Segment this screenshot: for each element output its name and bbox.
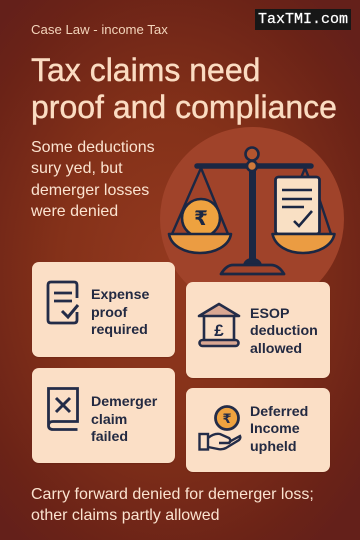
card: deferred income upheld	[186, 388, 330, 472]
card: demerger claim failed	[32, 368, 175, 463]
icon: hand holding rupee coin: ₹	[222, 412, 232, 427]
label: Income	[250, 421, 300, 437]
base	[221, 258, 284, 274]
card: expense proof required	[32, 262, 175, 357]
title: Tax claims need	[31, 52, 260, 88]
label: Demerger	[91, 394, 157, 410]
title	[31, 52, 337, 125]
subtitle: Some deductions	[31, 138, 155, 156]
subtitle: were denied	[31, 203, 118, 220]
label: proof	[91, 305, 127, 321]
label: deduction	[250, 323, 318, 339]
right pan	[272, 234, 334, 253]
illustration: balance scale	[160, 127, 344, 284]
label: claim	[91, 412, 127, 428]
label	[250, 404, 308, 455]
title: proof and compliance	[31, 88, 337, 124]
subtitle	[31, 138, 155, 220]
category label: Case Law - income Tax	[31, 22, 168, 37]
card: ESOP deduction allowed	[186, 282, 330, 378]
icon: bank with pound sign: £	[214, 321, 224, 340]
footer note: other claims partly allowed	[31, 507, 220, 524]
footer note: Carry forward denied for demerger loss;	[31, 486, 314, 503]
rupee coin	[182, 199, 220, 237]
top rings	[246, 148, 258, 171]
label	[250, 306, 318, 357]
left pan	[169, 234, 231, 253]
label: allowed	[250, 341, 302, 357]
icon: hand holding rupee coin	[198, 405, 242, 451]
left hanger	[172, 168, 228, 234]
label	[91, 394, 158, 445]
footer note	[31, 486, 314, 524]
document with check	[276, 177, 320, 234]
icon: document with check	[46, 280, 80, 324]
subtitle: demerger losses	[31, 182, 149, 199]
label: upheld	[250, 439, 296, 455]
pole	[249, 166, 256, 263]
logo: TaxTMI.com: TaxTMI.com	[258, 11, 348, 28]
icon: bank with pound sign	[198, 302, 240, 348]
label	[91, 287, 149, 338]
label: Deferred	[250, 404, 308, 420]
subtitle: sury yed, but	[31, 160, 123, 177]
rupee coin: ₹	[194, 206, 208, 230]
label: Expense	[91, 287, 149, 303]
beam	[197, 163, 311, 169]
backdrop circle	[160, 127, 344, 311]
icon: book with cross	[47, 387, 79, 431]
right hanger	[301, 168, 331, 234]
label: failed	[91, 429, 128, 445]
label: ESOP	[250, 306, 289, 322]
label: required	[91, 322, 148, 338]
